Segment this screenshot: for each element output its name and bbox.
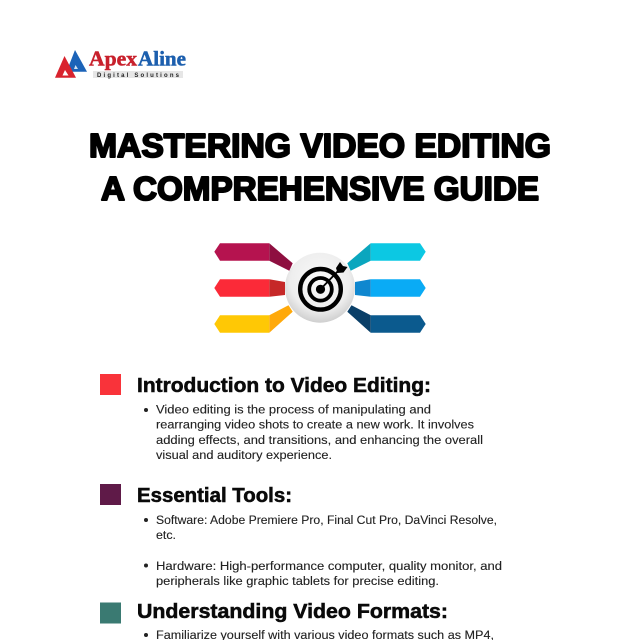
text block: hardware bullet: peripherals like graphic tablets for precise editing. <box>156 574 439 588</box>
icon: target disc <box>285 253 355 323</box>
text block: software bullet: Software: Adobe Premiere Pro, Final Cut Pro, DaVinci Resolve, <box>156 513 497 527</box>
text block: software bullet: etc. <box>156 528 176 542</box>
logo <box>55 46 186 79</box>
logo wordmark: Apex <box>89 46 138 70</box>
text block: introduction bullet: adding effects, and transitions, and enhancing the overall <box>156 433 483 447</box>
text block: software bullet <box>144 513 497 542</box>
section: essential tools <box>100 484 502 588</box>
logo tagline strip: Digital Solutions <box>97 73 180 79</box>
text block: hardware bullet: Hardware: High-performance computer, quality monitor, and <box>156 559 502 573</box>
arrow: cyan right top <box>347 243 426 271</box>
text block: introduction bullet <box>144 402 483 462</box>
text block: introduction bullet: visual and auditory experience. <box>156 448 332 462</box>
heading: video formats: Understanding Video Formats: <box>137 600 448 623</box>
title: A COMPREHENSIVE GUIDE <box>101 171 539 208</box>
title: MASTERING VIDEO EDITING <box>89 128 551 165</box>
icon: teal square <box>100 602 121 624</box>
text block: introduction bullet: rearranging video shots to create a new work. It involves <box>156 418 474 432</box>
section: introduction <box>100 374 483 462</box>
icon: red square <box>100 374 121 395</box>
arrow: blue right middle <box>355 279 426 297</box>
heading: introduction: Introduction to Video Editing: <box>137 374 431 397</box>
text block: hardware bullet <box>144 559 502 588</box>
central target diagram <box>214 243 426 333</box>
icon: logo triangles <box>55 50 87 78</box>
title <box>89 128 551 208</box>
arrow: yellow left bottom <box>214 305 293 333</box>
arrow: red left middle <box>214 279 285 297</box>
arrow: navy right bottom <box>347 305 426 333</box>
section: video formats <box>100 600 494 640</box>
icon: plum square <box>100 484 121 505</box>
arrow: crimson left top <box>214 243 293 271</box>
logo wordmark blue: Aline <box>138 46 186 70</box>
heading: essential tools: Essential Tools: <box>137 484 292 507</box>
text block: introduction bullet: Video editing is the process of manipulating and <box>156 402 431 416</box>
